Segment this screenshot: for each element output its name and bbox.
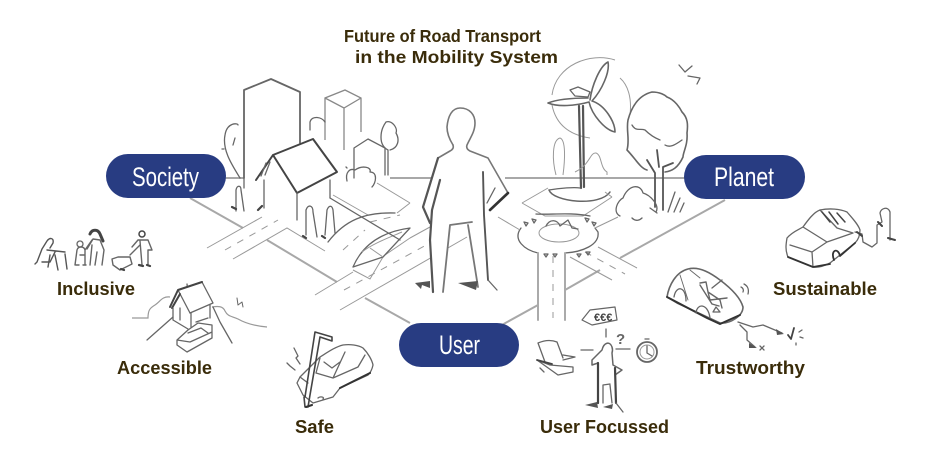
inclusive: people icon xyxy=(35,230,152,270)
title xyxy=(344,26,558,67)
small people xyxy=(232,186,335,238)
wind turbine xyxy=(522,58,631,216)
tree xyxy=(616,65,700,220)
trees and bushes by buildings xyxy=(222,117,398,188)
pill: Society: Society xyxy=(132,162,199,192)
title: in the Mobility System xyxy=(355,47,558,67)
user focussed: person with choices icon: €€€ xyxy=(594,312,612,324)
pill: User xyxy=(399,323,519,367)
label: User Focussed: User Focussed xyxy=(540,417,669,437)
title: Future of Road Transport xyxy=(344,26,541,46)
label: Accessible: Accessible xyxy=(117,358,212,378)
label: Trustworthy: Trustworthy xyxy=(696,358,805,378)
user focussed: person with choices icon xyxy=(537,307,657,412)
pill: Planet xyxy=(684,155,805,199)
roundabout xyxy=(498,214,637,320)
label: Sustainable: Sustainable xyxy=(773,279,877,299)
buildings xyxy=(244,79,385,178)
sustainable: electric car and charger icon xyxy=(786,208,895,267)
house xyxy=(256,139,400,240)
roads xyxy=(207,183,467,310)
accessible: house and car icon xyxy=(132,282,267,352)
bushes near turbine xyxy=(553,138,607,175)
label: Inclusive: Inclusive xyxy=(57,279,135,299)
ground outline xyxy=(190,178,725,326)
pill: Society xyxy=(106,154,226,198)
safe: crashed car icon xyxy=(287,332,373,407)
trustworthy: autonomous pod icon xyxy=(667,268,803,350)
label: Safe: Safe xyxy=(295,417,334,437)
pill: Planet: Planet xyxy=(714,162,774,192)
user focussed: person with choices icon: ? xyxy=(616,331,625,348)
user figure xyxy=(415,108,508,292)
pill: User: User xyxy=(439,330,480,360)
